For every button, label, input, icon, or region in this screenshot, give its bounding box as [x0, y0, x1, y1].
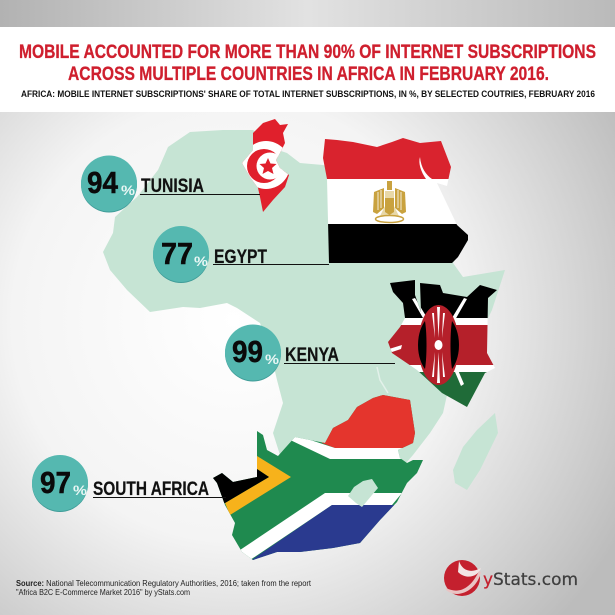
label: Kenya: 99: [232, 334, 263, 369]
icon: red sphere: [444, 560, 481, 596]
map: river: [377, 367, 388, 393]
logo: yStats.com: [444, 560, 578, 596]
title: [19, 41, 596, 85]
label: Tunisia: [81, 156, 260, 212]
label: Kenya: KENYA: [285, 345, 339, 366]
label: South Africa: %: [73, 482, 88, 498]
map: Lesotho: [348, 479, 378, 507]
source note: Source: National Telecommunication Regulatory Authorities, 2016; taken from the report: [16, 579, 312, 588]
icon: star: [260, 158, 276, 174]
label: South Africa: [32, 455, 226, 512]
label: Tunisia: TUNISIA: [141, 176, 204, 197]
icon: Maasai shield: [418, 305, 459, 385]
flag map: South Africa: [213, 395, 423, 560]
label: Tunisia: 94: [87, 165, 119, 200]
header band: [0, 0, 615, 112]
icon: eagle of Saladin: [373, 181, 406, 222]
source note: [16, 579, 312, 597]
map: Africa: [103, 130, 505, 490]
label: Egypt: 77: [161, 236, 193, 271]
flag map: Kenya: [388, 280, 497, 407]
source note: "Africa B2C E-Commerce Market 2016" by yStats.com: [16, 588, 190, 597]
flag map: Egypt: [323, 138, 468, 263]
flag map: Tunisia: [242, 119, 289, 212]
logo: yStats.com: yStats.com: [483, 570, 578, 590]
label: Egypt: EGYPT: [214, 247, 267, 268]
label: Tunisia: %: [121, 182, 136, 198]
label: South Africa: SOUTH AFRICA: [93, 479, 209, 500]
label: Egypt: [153, 226, 329, 283]
label: Egypt: %: [194, 253, 209, 269]
map: Madagascar: [453, 413, 498, 490]
label: Kenya: [225, 324, 395, 382]
label: South Africa: 97: [40, 465, 71, 500]
label: Kenya: %: [265, 351, 280, 367]
